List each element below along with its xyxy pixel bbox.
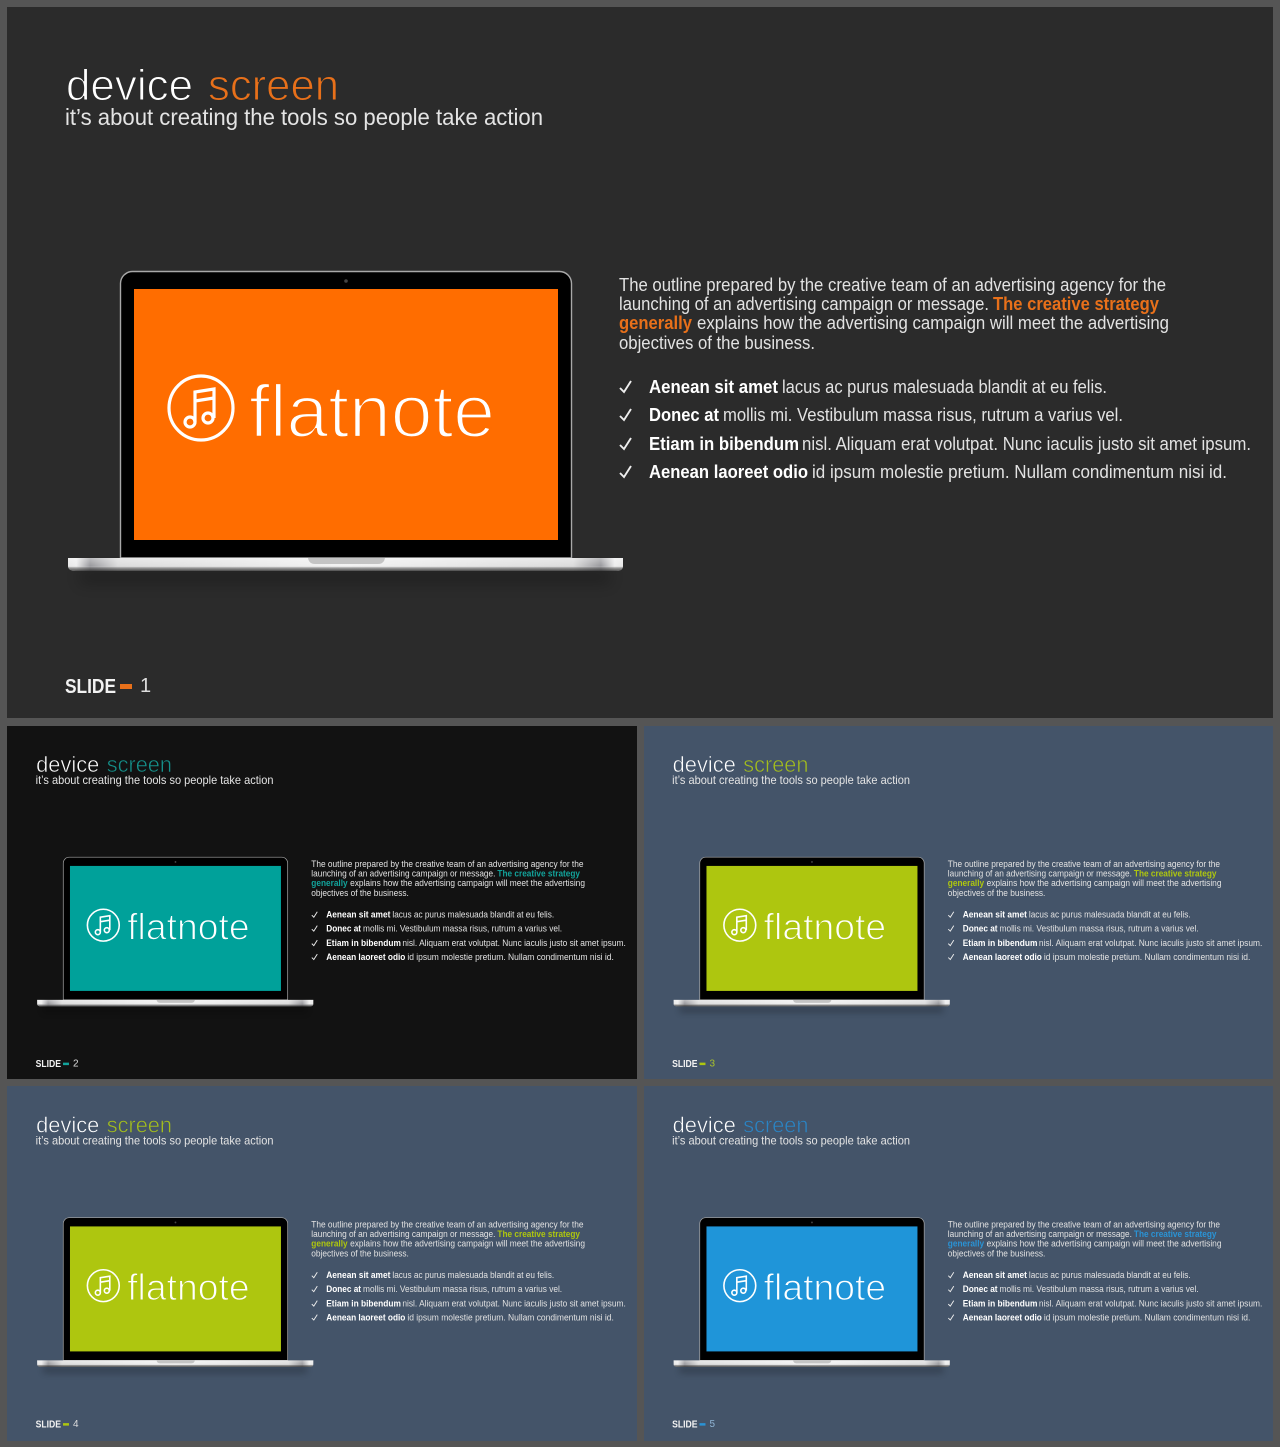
slide 4 description: explains how the advertising campaign will meet the advertising — [350, 1238, 585, 1248]
slide 2 number — [36, 1059, 79, 1070]
slide 1 background — [7, 7, 1273, 718]
slide 3 laptop — [674, 857, 950, 1013]
slide 2 checklist: lacus ac purus malesuada blandit at eu felis. — [392, 910, 554, 920]
slide 1 description: objectives of the business. — [619, 332, 815, 353]
slide 5 title: device — [673, 1112, 736, 1137]
slide 3 checklist — [948, 910, 1262, 962]
screen — [134, 289, 558, 540]
slide 3 subtitle: it’s about creating the tools so people take action — [672, 774, 910, 787]
base — [37, 1000, 313, 1006]
shadow — [680, 1366, 943, 1373]
slide 4 checklist: Aenean laoreet odio — [326, 1313, 406, 1323]
slide 3 checklist: nisl. Aliquam erat volutpat. Nunc iaculis justo sit amet ipsum. — [1039, 938, 1262, 948]
slide 2 number: 2 — [73, 1059, 79, 1070]
slide 3 title — [673, 752, 808, 777]
slide 4 checklist: Etiam in bibendum — [326, 1299, 401, 1309]
slide 1 title: screen — [208, 61, 339, 110]
slide 5 checklist: Etiam in bibendum — [963, 1299, 1037, 1309]
slide 2 description: The creative strategy — [497, 868, 581, 878]
slide 5 laptop — [674, 1218, 950, 1373]
slide 1 description: launching of an advertising campaign or message. — [619, 293, 989, 314]
slide 3 title: device — [673, 752, 736, 777]
logo wordmark: flatnote — [249, 370, 495, 453]
slide 3 description: The outline prepared by the creative team of an advertising agency for the — [948, 859, 1220, 869]
lid — [700, 1218, 924, 1360]
slide 1 number — [65, 675, 151, 698]
slide 2 description: generally — [311, 878, 348, 888]
logo wordmark: flatnote — [764, 907, 886, 948]
slide 4 subtitle: it’s about creating the tools so people take action — [36, 1135, 273, 1148]
slide 4 title: screen — [107, 1112, 172, 1137]
logo icon — [87, 909, 119, 941]
slide 5 description: explains how the advertising campaign will meet the advertising — [987, 1238, 1221, 1248]
slide 3 number: SLIDE — [672, 1059, 698, 1070]
slide 3 background — [644, 726, 1273, 1079]
screen — [70, 866, 281, 991]
slide 5 subtitle: it’s about creating the tools so people take action — [672, 1135, 910, 1148]
slide 5 checklist: Donec at — [963, 1284, 998, 1294]
slide 5 description: launching of an advertising campaign or message. — [948, 1229, 1132, 1239]
slide 1 subtitle: it’s about creating the tools so people take action — [65, 104, 543, 130]
screen — [706, 866, 917, 991]
slide 5 number: 5 — [709, 1419, 715, 1430]
lid — [63, 857, 288, 1000]
slide 1 laptop — [68, 272, 623, 584]
slide 1 checklist: Aenean sit amet — [649, 376, 778, 397]
slide 5 description: The outline prepared by the creative team of an advertising agency for the — [948, 1219, 1220, 1229]
slide 4 checklist: Aenean sit amet — [326, 1270, 390, 1280]
slide 4 number: 4 — [73, 1419, 79, 1430]
slide 2 description: launching of an advertising campaign or message. — [311, 868, 495, 878]
slide 5 checklist: Aenean sit amet — [963, 1270, 1027, 1280]
logo wordmark: flatnote — [127, 907, 250, 948]
slide 5 panel — [644, 1086, 1273, 1441]
slide 2 description: explains how the advertising campaign will meet the advertising — [350, 878, 585, 888]
slide 2 description: The outline prepared by the creative team of an advertising agency for the — [311, 859, 584, 869]
slide 2 checklist: mollis mi. Vestibulum massa risus, rutrum a varius vel. — [363, 924, 562, 934]
slide 1 description: generally — [619, 312, 693, 333]
slide 4 title — [36, 1112, 172, 1137]
slide 3 checklist: mollis mi. Vestibulum massa risus, rutrum a varius vel. — [1000, 924, 1199, 934]
slide 5 title — [673, 1112, 808, 1137]
slide 4 description: launching of an advertising campaign or message. — [311, 1229, 495, 1239]
base — [68, 558, 623, 571]
slide 1 description: The creative strategy — [993, 293, 1160, 314]
slide 3 number — [672, 1059, 715, 1070]
slide 4 laptop — [37, 1218, 313, 1373]
slide 5 background — [644, 1086, 1273, 1441]
shadow — [80, 570, 610, 584]
slide 4 checklist: id ipsum molestie pretium. Nullam condimentum nisi id. — [407, 1313, 614, 1323]
slide 2 checklist — [312, 910, 626, 962]
slide 1 checklist: id ipsum molestie pretium. Nullam condimentum nisi id. — [812, 461, 1227, 482]
slide 3 number: 3 — [709, 1059, 715, 1070]
slide 1 checklist — [620, 376, 1251, 482]
slide 5 checklist: nisl. Aliquam erat volutpat. Nunc iaculis justo sit amet ipsum. — [1039, 1299, 1262, 1309]
slide 5 title: screen — [743, 1112, 808, 1137]
slide 1 description: The outline prepared by the creative team of an advertising agency for the — [619, 274, 1166, 295]
slide 3 description: explains how the advertising campaign will meet the advertising — [987, 878, 1221, 888]
slide 3 description: The creative strategy — [1134, 868, 1217, 878]
slide 3 description — [948, 859, 1221, 898]
slide 2 laptop — [37, 857, 313, 1013]
slide 3 description: generally — [948, 878, 985, 888]
slide 3 checklist: Aenean sit amet — [963, 910, 1027, 920]
logo wordmark: flatnote — [764, 1267, 886, 1308]
camera — [175, 861, 176, 863]
slide 2 checklist: Aenean sit amet — [326, 910, 390, 920]
camera — [811, 1222, 813, 1223]
slide 1 checklist: Donec at — [649, 404, 719, 425]
slide 4 panel — [7, 1086, 637, 1441]
slide 2 background — [7, 726, 637, 1079]
slide 4 description: generally — [311, 1238, 348, 1248]
slide 2 checklist: Etiam in bibendum — [326, 938, 401, 948]
slide 3 title: screen — [743, 752, 808, 777]
slide 5 checklist: lacus ac purus malesuada blandit at eu felis. — [1029, 1270, 1191, 1280]
slide 2 checklist: id ipsum molestie pretium. Nullam condimentum nisi id. — [407, 952, 614, 962]
slide 2 number: SLIDE — [36, 1059, 61, 1070]
slide 3 checklist: Aenean laoreet odio — [963, 952, 1042, 962]
slide 2 content — [36, 752, 626, 1070]
slide 1 title: device — [66, 61, 193, 110]
slide 4 description: The outline prepared by the creative team of an advertising agency for the — [311, 1219, 584, 1229]
slide 1 description: explains how the advertising campaign will meet the advertising — [697, 312, 1169, 333]
logo icon — [169, 376, 233, 440]
base — [37, 1360, 313, 1367]
lid — [120, 272, 572, 558]
slide 1 checklist: lacus ac purus malesuada blandit at eu felis. — [782, 376, 1107, 397]
base — [674, 1000, 950, 1006]
slide 4 checklist: Donec at — [326, 1284, 361, 1294]
slide 2 panel — [7, 726, 637, 1079]
slide 1 title — [66, 61, 339, 110]
slide 1 checklist: Aenean laoreet odio — [649, 461, 808, 482]
slide 4 description: objectives of the business. — [311, 1248, 409, 1258]
slide 3 checklist: Donec at — [963, 924, 998, 934]
slide 1 checklist: mollis mi. Vestibulum massa risus, rutrum a varius vel. — [723, 404, 1123, 425]
slide 1 number: 1 — [140, 675, 151, 697]
slide 4 content — [36, 1112, 626, 1431]
slide 5 checklist — [948, 1270, 1262, 1323]
slide 4 number — [36, 1419, 79, 1431]
shadow — [680, 1006, 943, 1013]
slide 3 panel — [644, 726, 1273, 1079]
logo icon — [87, 1270, 119, 1302]
slide 3 content — [672, 752, 1262, 1070]
slide 5 checklist: Aenean laoreet odio — [963, 1313, 1042, 1323]
slide 2 checklist: nisl. Aliquam erat volutpat. Nunc iaculis justo sit amet ipsum. — [402, 938, 626, 948]
slide 1 number: SLIDE — [65, 676, 116, 698]
slide 2 subtitle: it’s about creating the tools so people take action — [36, 774, 273, 787]
slide 2 title: screen — [107, 752, 172, 777]
slide 5 number: SLIDE — [672, 1420, 698, 1431]
screen — [70, 1226, 281, 1351]
slide 5 description — [948, 1219, 1221, 1258]
slide 5 checklist: mollis mi. Vestibulum massa risus, rutrum a varius vel. — [1000, 1284, 1199, 1294]
slide 3 description: objectives of the business. — [948, 888, 1045, 898]
slide 2 description — [311, 859, 585, 898]
slide 3 description: launching of an advertising campaign or message. — [948, 868, 1132, 878]
slide 3 checklist: lacus ac purus malesuada blandit at eu felis. — [1029, 910, 1191, 920]
screen — [706, 1226, 917, 1351]
shadow — [43, 1006, 307, 1013]
shadow — [43, 1366, 307, 1373]
slide 1 panel — [7, 7, 1273, 718]
slide 5 content — [672, 1112, 1262, 1431]
slide 5 description: generally — [948, 1238, 985, 1248]
slide 4 checklist: lacus ac purus malesuada blandit at eu felis. — [392, 1270, 554, 1280]
slide 2 checklist: Donec at — [326, 924, 361, 934]
slide 4 title: device — [36, 1112, 99, 1137]
slide 5 checklist: id ipsum molestie pretium. Nullam condimentum nisi id. — [1044, 1313, 1250, 1323]
slide 4 number: SLIDE — [36, 1420, 61, 1431]
slide 1 description — [619, 274, 1169, 353]
camera — [811, 861, 813, 863]
slide 2 description: objectives of the business. — [311, 888, 409, 898]
slide 4 checklist — [312, 1270, 626, 1323]
slide 2 checklist: Aenean laoreet odio — [326, 952, 406, 962]
logo wordmark: flatnote — [127, 1267, 250, 1308]
slide 3 checklist: Etiam in bibendum — [963, 938, 1037, 948]
camera — [344, 279, 348, 283]
base — [674, 1360, 950, 1367]
slide 1 checklist: Etiam in bibendum — [649, 433, 799, 454]
slide 2 title: device — [36, 752, 99, 777]
lid — [700, 857, 924, 1000]
camera — [175, 1222, 176, 1223]
logo icon — [724, 909, 756, 941]
slide 5 description: The creative strategy — [1134, 1229, 1217, 1239]
slide 4 checklist: mollis mi. Vestibulum massa risus, rutrum a varius vel. — [363, 1284, 562, 1294]
slide 5 number — [672, 1419, 715, 1431]
logo icon — [724, 1270, 756, 1302]
slide 5 description: objectives of the business. — [948, 1248, 1045, 1258]
lid — [63, 1218, 288, 1360]
slide 4 background — [7, 1086, 637, 1441]
slide 3 checklist: id ipsum molestie pretium. Nullam condimentum nisi id. — [1044, 952, 1250, 962]
slide 4 description — [311, 1219, 585, 1258]
slide 2 title — [36, 752, 172, 777]
slide 4 checklist: nisl. Aliquam erat volutpat. Nunc iaculis justo sit amet ipsum. — [402, 1299, 626, 1309]
slide 4 description: The creative strategy — [497, 1229, 581, 1239]
